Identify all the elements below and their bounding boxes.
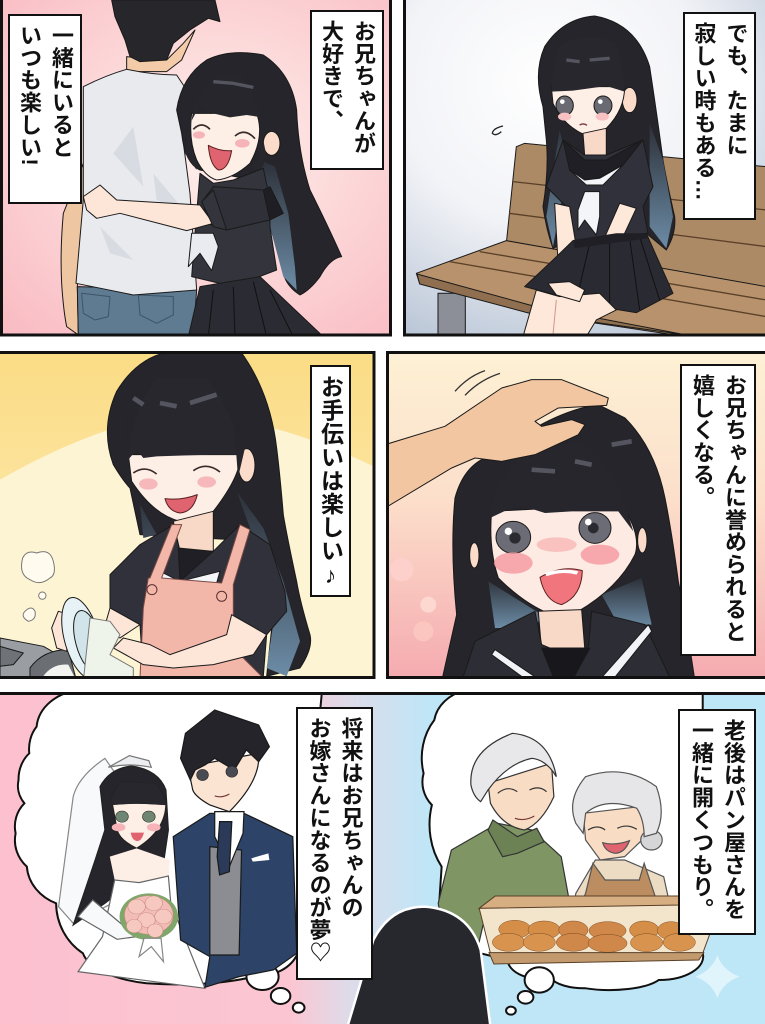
pink apron [140, 525, 263, 678]
closed happy eyes [133, 466, 220, 474]
big eyes [496, 521, 531, 553]
groom [173, 710, 297, 987]
sailor blouse [192, 168, 277, 287]
pleated skirt [188, 277, 323, 337]
brother's hair [112, 0, 220, 62]
hugging arm [83, 185, 213, 231]
open mouth [540, 569, 582, 605]
bride [59, 756, 205, 988]
left thought cloud [15, 690, 322, 1013]
caption: sometimes lonely: 寂しい時もある… [692, 22, 716, 201]
caption: dream of being bride [296, 707, 373, 980]
right thought cloud [422, 690, 703, 1015]
caption: happy when praised: 嬉しくなる。 [690, 374, 715, 508]
steam puffs [21, 552, 54, 621]
sink [0, 638, 54, 676]
girl washing dishes [52, 351, 311, 678]
bread tray [479, 896, 712, 964]
caption: helping is fun [310, 365, 351, 597]
girl hugging [83, 53, 342, 337]
arms [103, 608, 140, 638]
caption: always fun together: いつも楽しい! [17, 24, 42, 166]
legs [523, 290, 616, 337]
caption: loves brother: お兄ちゃんが [351, 20, 376, 154]
arms [554, 202, 576, 256]
skirt [525, 233, 673, 313]
neck [583, 128, 606, 155]
caption: bakery in old age: 老後はパン屋さんを [721, 719, 746, 921]
panel: dreams of the future [0, 690, 765, 1024]
panel: head pat [385, 352, 765, 681]
plate and cloth [61, 597, 134, 676]
girl's head from behind [347, 907, 490, 1024]
sad eyes [556, 96, 573, 115]
caption: sometimes lonely: でも、たまに [724, 22, 748, 156]
elderly brother [438, 733, 569, 957]
brother's t-shirt [76, 69, 197, 295]
uniform collar [462, 611, 672, 681]
pat motion lines [455, 371, 500, 395]
panel: hugging brother [0, 0, 391, 337]
brother's neck [127, 30, 195, 72]
sigh mark [492, 126, 503, 135]
white scarf [570, 165, 623, 235]
brother's left arm [61, 163, 83, 335]
white scarf [188, 233, 218, 271]
caption: bakery in old age: 一緒に開くつもり。 [689, 719, 714, 921]
closed happy eyes [193, 125, 255, 139]
caption: helping is fun: お手伝いは楽しい♪ [318, 375, 344, 589]
brother's patting hand [385, 380, 608, 508]
open smiling mouth [208, 145, 232, 170]
caption: dream of being bride: 将来はお兄ちゃんの [338, 717, 364, 919]
caption: always fun together [8, 14, 82, 204]
caption: happy when praised [680, 364, 756, 656]
caption: dream of being bride: お嫁さんになるのが夢♡ [306, 717, 332, 963]
bench [416, 143, 765, 337]
girl smiling [442, 405, 695, 681]
elderly wife [571, 772, 670, 927]
caption: sometimes lonely [683, 12, 756, 220]
blouse [110, 525, 287, 676]
sparkle [695, 955, 739, 998]
caption: bakery in old age [678, 709, 756, 935]
caption: happy when praised: お兄ちゃんに誉められると [722, 374, 747, 643]
caption: always fun together: 一緒にいると [49, 24, 74, 158]
caption: loves brother [310, 10, 384, 170]
blush [494, 552, 533, 574]
neck [538, 610, 585, 651]
panel: lonely on bench [404, 0, 765, 337]
bouquet [120, 893, 178, 940]
caption: loves brother: 大好きで、 [319, 20, 344, 132]
panel: helping with dishes [0, 351, 377, 683]
neck [173, 511, 213, 551]
brother's jeans [77, 287, 197, 337]
girl sitting [523, 16, 675, 337]
open mouth [165, 495, 197, 513]
uniform blouse [546, 140, 653, 241]
